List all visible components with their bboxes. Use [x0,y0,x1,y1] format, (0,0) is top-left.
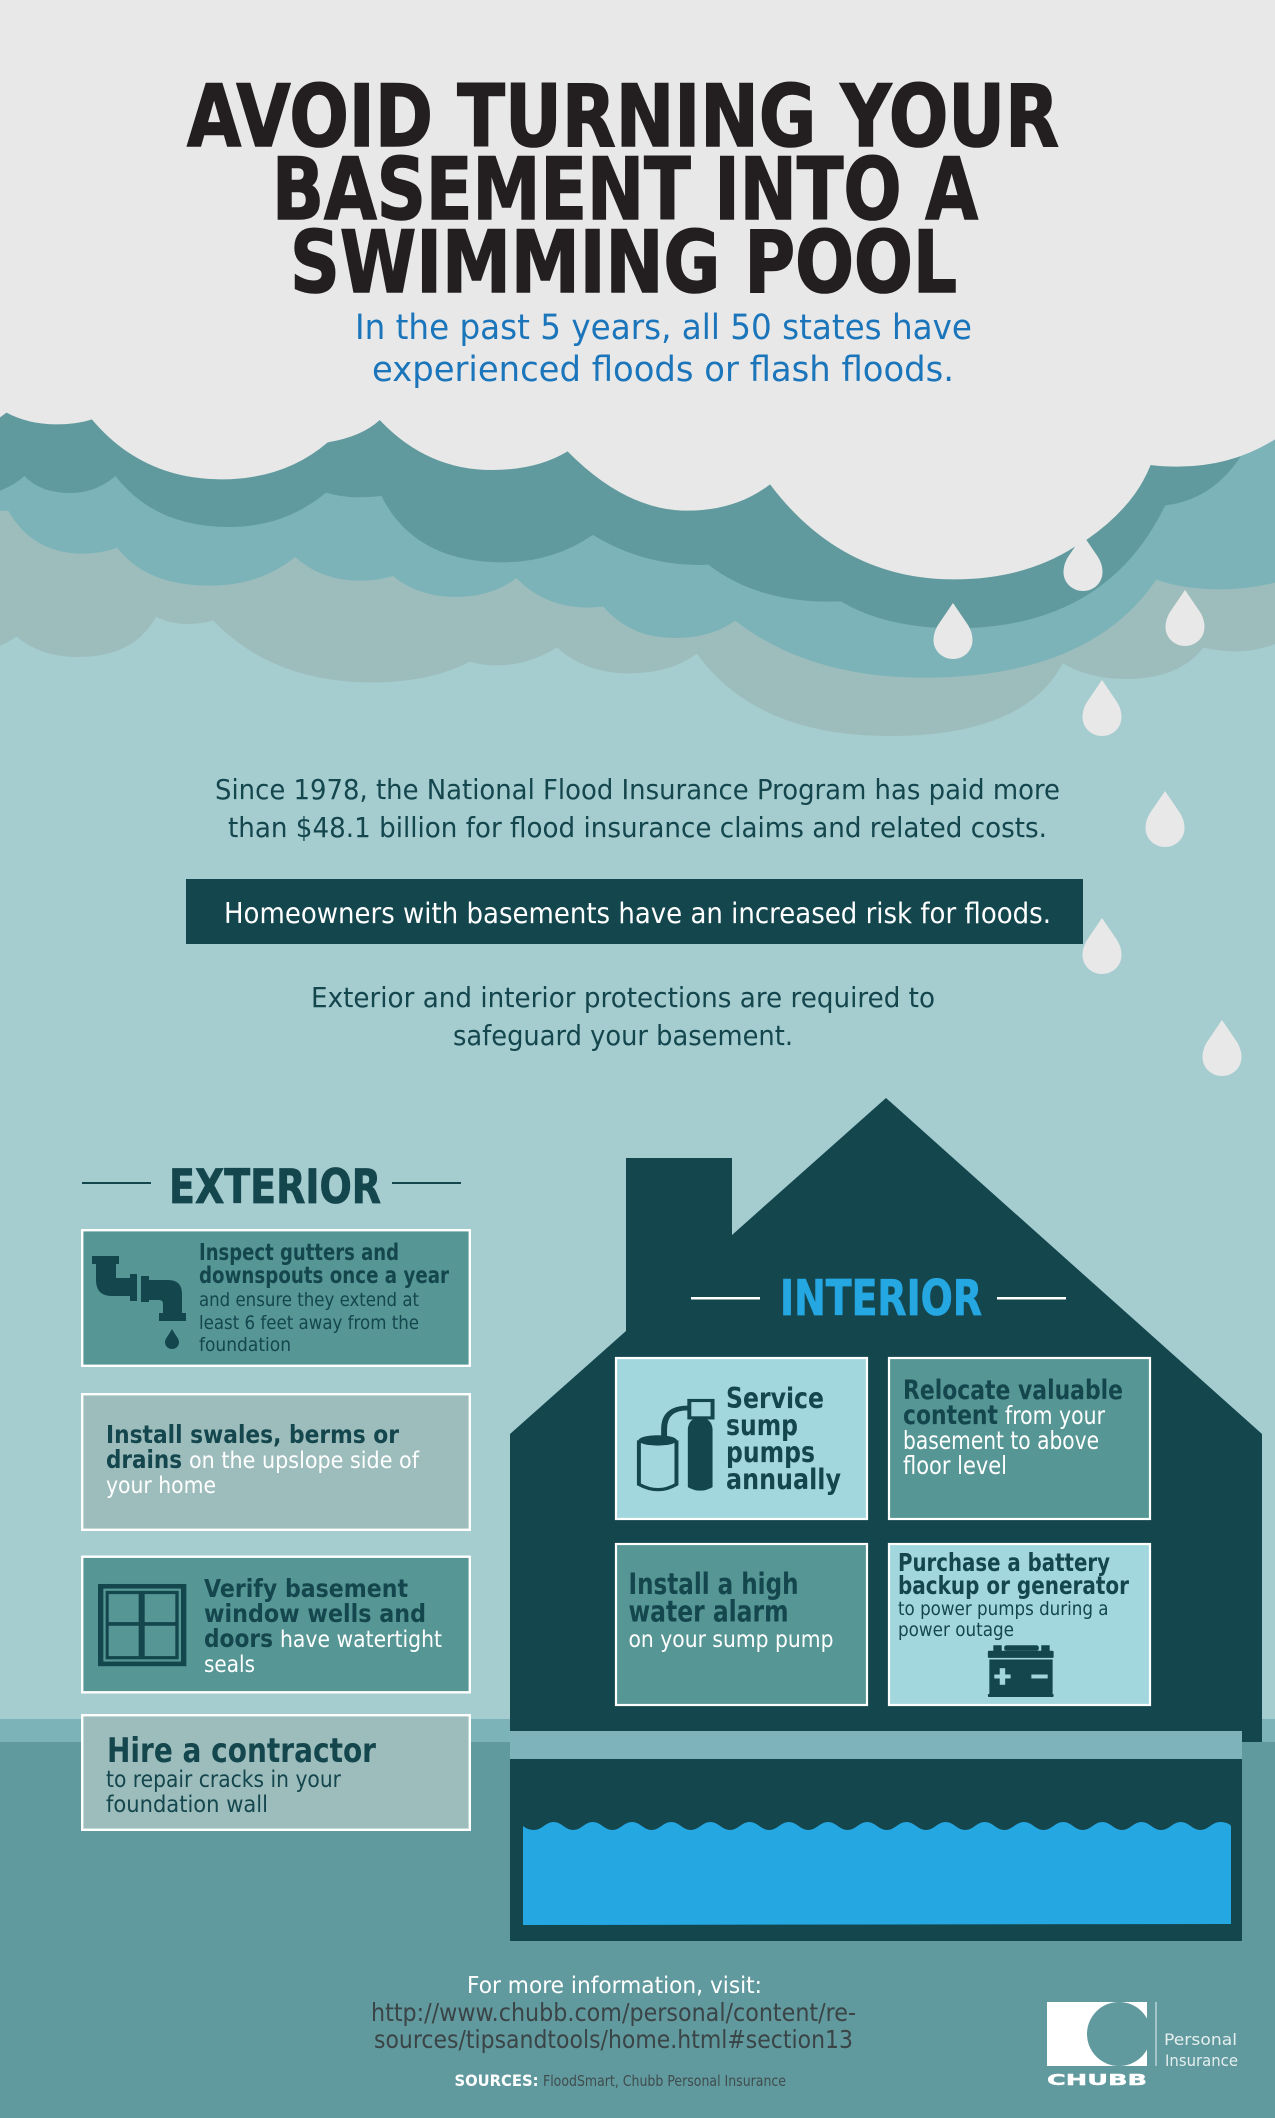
sources: FloodSmart, Chubb Personal Insurance [543,2072,786,2090]
panel: swales, berms or drains [82,1394,470,1530]
panel: service sump pumps: annually [726,1463,841,1496]
panel: relocate valuable content [889,1358,1150,1519]
panel: hire a contractor [82,1715,470,1830]
panel: service sump pumps: pumps [726,1436,815,1469]
logo: Chubb Personal Insurance: CHUBB [1047,2071,1147,2089]
panel: swales, berms or drains: on the upslope side of [189,1446,420,1474]
flood insurance statement: than $48.1 billion for flood insurance claims and related costs. [228,812,1047,844]
panel: battery backup: to power pumps during a [898,1598,1108,1620]
panel: basement window wells: doors [204,1624,273,1653]
panel: swales, berms or drains: Install swales, berms or [106,1420,400,1449]
subtitle: experienced floods or flash floods. [372,350,954,390]
panel: basement window wells: have watertight [280,1627,442,1653]
panel: battery backup: backup or generator [898,1571,1130,1600]
more information: http://www.chubb.com/personal/content/re- [371,1998,856,2027]
subtitle [355,308,972,390]
panel: inspect gutters [82,1230,470,1366]
panel: relocate valuable content: Relocate valuable [903,1375,1123,1406]
protections statement: safeguard your basement. [453,1020,793,1052]
flood insurance statement: Since 1978, the National Flood Insurance Program has paid more [215,774,1060,806]
storm clouds [0,0,1275,736]
title: AVOID TURNING YOUR [187,67,1059,167]
panel: swales, berms or drains: drains [106,1445,182,1474]
panel: battery backup [889,1544,1150,1705]
risk banner: Homeowners with basements have an increased risk for floods. [224,897,1051,930]
panel: high water alarm: Install a high [628,1567,798,1601]
panel: basement window wells: window wells and [204,1599,426,1628]
panel: hire a contractor: to repair cracks in your [106,1765,341,1793]
flood insurance statement [215,774,1060,844]
panel: high water alarm: on your sump pump [628,1625,834,1653]
panel: service sump pumps: sump [726,1409,798,1442]
protections statement [311,982,935,1052]
icon: window [98,1584,186,1666]
icon: battery [988,1645,1054,1697]
panel: swales, berms or drains: your home [106,1471,216,1499]
panel: inspect gutters: downspouts once a year [199,1263,450,1289]
panel: inspect gutters: Inspect gutters and [199,1240,399,1266]
icon: sump pump [638,1400,713,1491]
panel: hire a contractor: foundation wall [106,1790,268,1818]
interior heading: INTERIOR [780,1270,982,1327]
sources [454,2071,786,2090]
subtitle: In the past 5 years, all 50 states have [355,308,972,348]
panel: high water alarm: water alarm [628,1594,788,1628]
risk banner [186,879,1083,944]
panel: relocate valuable content: basement to above [903,1426,1099,1455]
protections statement: Exterior and interior protections are required to [311,982,935,1014]
panel: battery backup: Purchase a battery [898,1548,1110,1577]
exterior heading: EXTERIOR [169,1160,381,1215]
panel: hire a contractor: Hire a contractor [107,1731,376,1771]
logo: Chubb Personal Insurance [1047,2000,1238,2089]
panel: inspect gutters: foundation [199,1334,291,1356]
title: BASEMENT INTO A [272,140,978,240]
title: SWIMMING POOL [290,213,957,313]
panel: inspect gutters: least 6 feet away from the [199,1312,419,1334]
panel: service sump pumps: Service [726,1382,824,1415]
more information: For more information, visit: [467,1973,762,1999]
more information: sources/tipsandtools/home.html#section13 [374,2025,853,2054]
panel: service sump pumps [616,1358,867,1519]
sources: SOURCES: [454,2071,538,2090]
panel: high water alarm [616,1544,867,1705]
more information [371,1973,856,2054]
panel: basement window wells: Verify basement [204,1574,408,1603]
logo: Chubb Personal Insurance: Insurance [1165,2051,1238,2070]
house [510,1098,1262,1941]
flood water [523,1822,1231,1925]
title [187,67,1059,313]
panel: relocate valuable content: content [903,1400,998,1431]
panel: basement window wells: seals [204,1652,255,1678]
rain drops [934,535,1242,1076]
panel: inspect gutters: and ensure they extend at [199,1289,419,1311]
panel: relocate valuable content: floor level [903,1451,1007,1480]
panel: relocate valuable content: from your [1005,1401,1106,1430]
panel: battery backup: power outage [898,1619,1014,1641]
panel: basement window wells [82,1557,470,1692]
icon: dripping pipe [92,1256,186,1349]
logo: Chubb Personal Insurance: Personal [1164,2030,1237,2049]
